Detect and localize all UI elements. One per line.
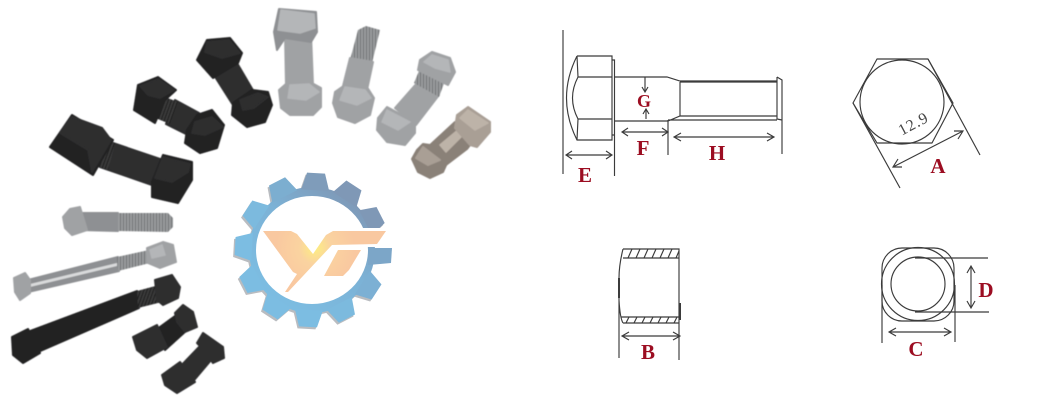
diagram: nut section bbox=[619, 249, 680, 364]
bolt: long black with nut bbox=[12, 275, 180, 363]
dimension F bbox=[622, 128, 668, 160]
dimension H: H bbox=[709, 141, 725, 165]
bolt: large black square head bbox=[50, 115, 192, 203]
dimension H bbox=[674, 133, 774, 165]
square and circles bbox=[882, 248, 989, 343]
bolt: grey flange with coarse thread bbox=[63, 207, 173, 235]
gear inner circle bbox=[256, 196, 368, 304]
diagram: bolt side view bbox=[563, 30, 782, 187]
bolt: grey threaded bbox=[333, 26, 380, 123]
dimension A: A bbox=[930, 154, 946, 178]
dimension B: B bbox=[641, 340, 655, 364]
bolt: grey with nut bbox=[377, 52, 455, 145]
logo: blue gear with YT mark bbox=[233, 172, 392, 330]
bolt: tan with nut bbox=[412, 107, 490, 178]
gear shadow bbox=[233, 174, 385, 330]
dimension E: E bbox=[578, 163, 592, 187]
diagram: hex head top view bbox=[853, 59, 980, 188]
photo: bolt collection bbox=[12, 9, 490, 393]
section outline bbox=[619, 249, 680, 360]
dimension C: C bbox=[908, 337, 924, 361]
gap behind the T bar bbox=[360, 228, 392, 247]
YT mark: Y and T bar bbox=[263, 231, 386, 292]
gear teeth and ring bbox=[234, 172, 392, 328]
diagram: square head top view bbox=[882, 248, 994, 361]
bolt outline bbox=[563, 30, 782, 176]
bolt: small black square head bbox=[162, 333, 224, 393]
bolt: small black dome head bbox=[133, 305, 197, 358]
bolt: black upper bbox=[197, 38, 272, 127]
dimension G: G bbox=[637, 91, 651, 111]
YT mark: T stem bbox=[324, 250, 361, 276]
dimension E bbox=[566, 151, 612, 187]
dimension D: D bbox=[978, 278, 994, 302]
bolt: black square head short bbox=[134, 77, 224, 153]
bolt: grey square head bbox=[274, 9, 321, 115]
dimension F: F bbox=[637, 136, 649, 160]
hexagon and circle bbox=[853, 59, 980, 188]
grade marking: 12.9 bbox=[896, 109, 932, 139]
bolt: long silver with nut bbox=[14, 242, 176, 300]
dimension G bbox=[637, 77, 651, 119]
